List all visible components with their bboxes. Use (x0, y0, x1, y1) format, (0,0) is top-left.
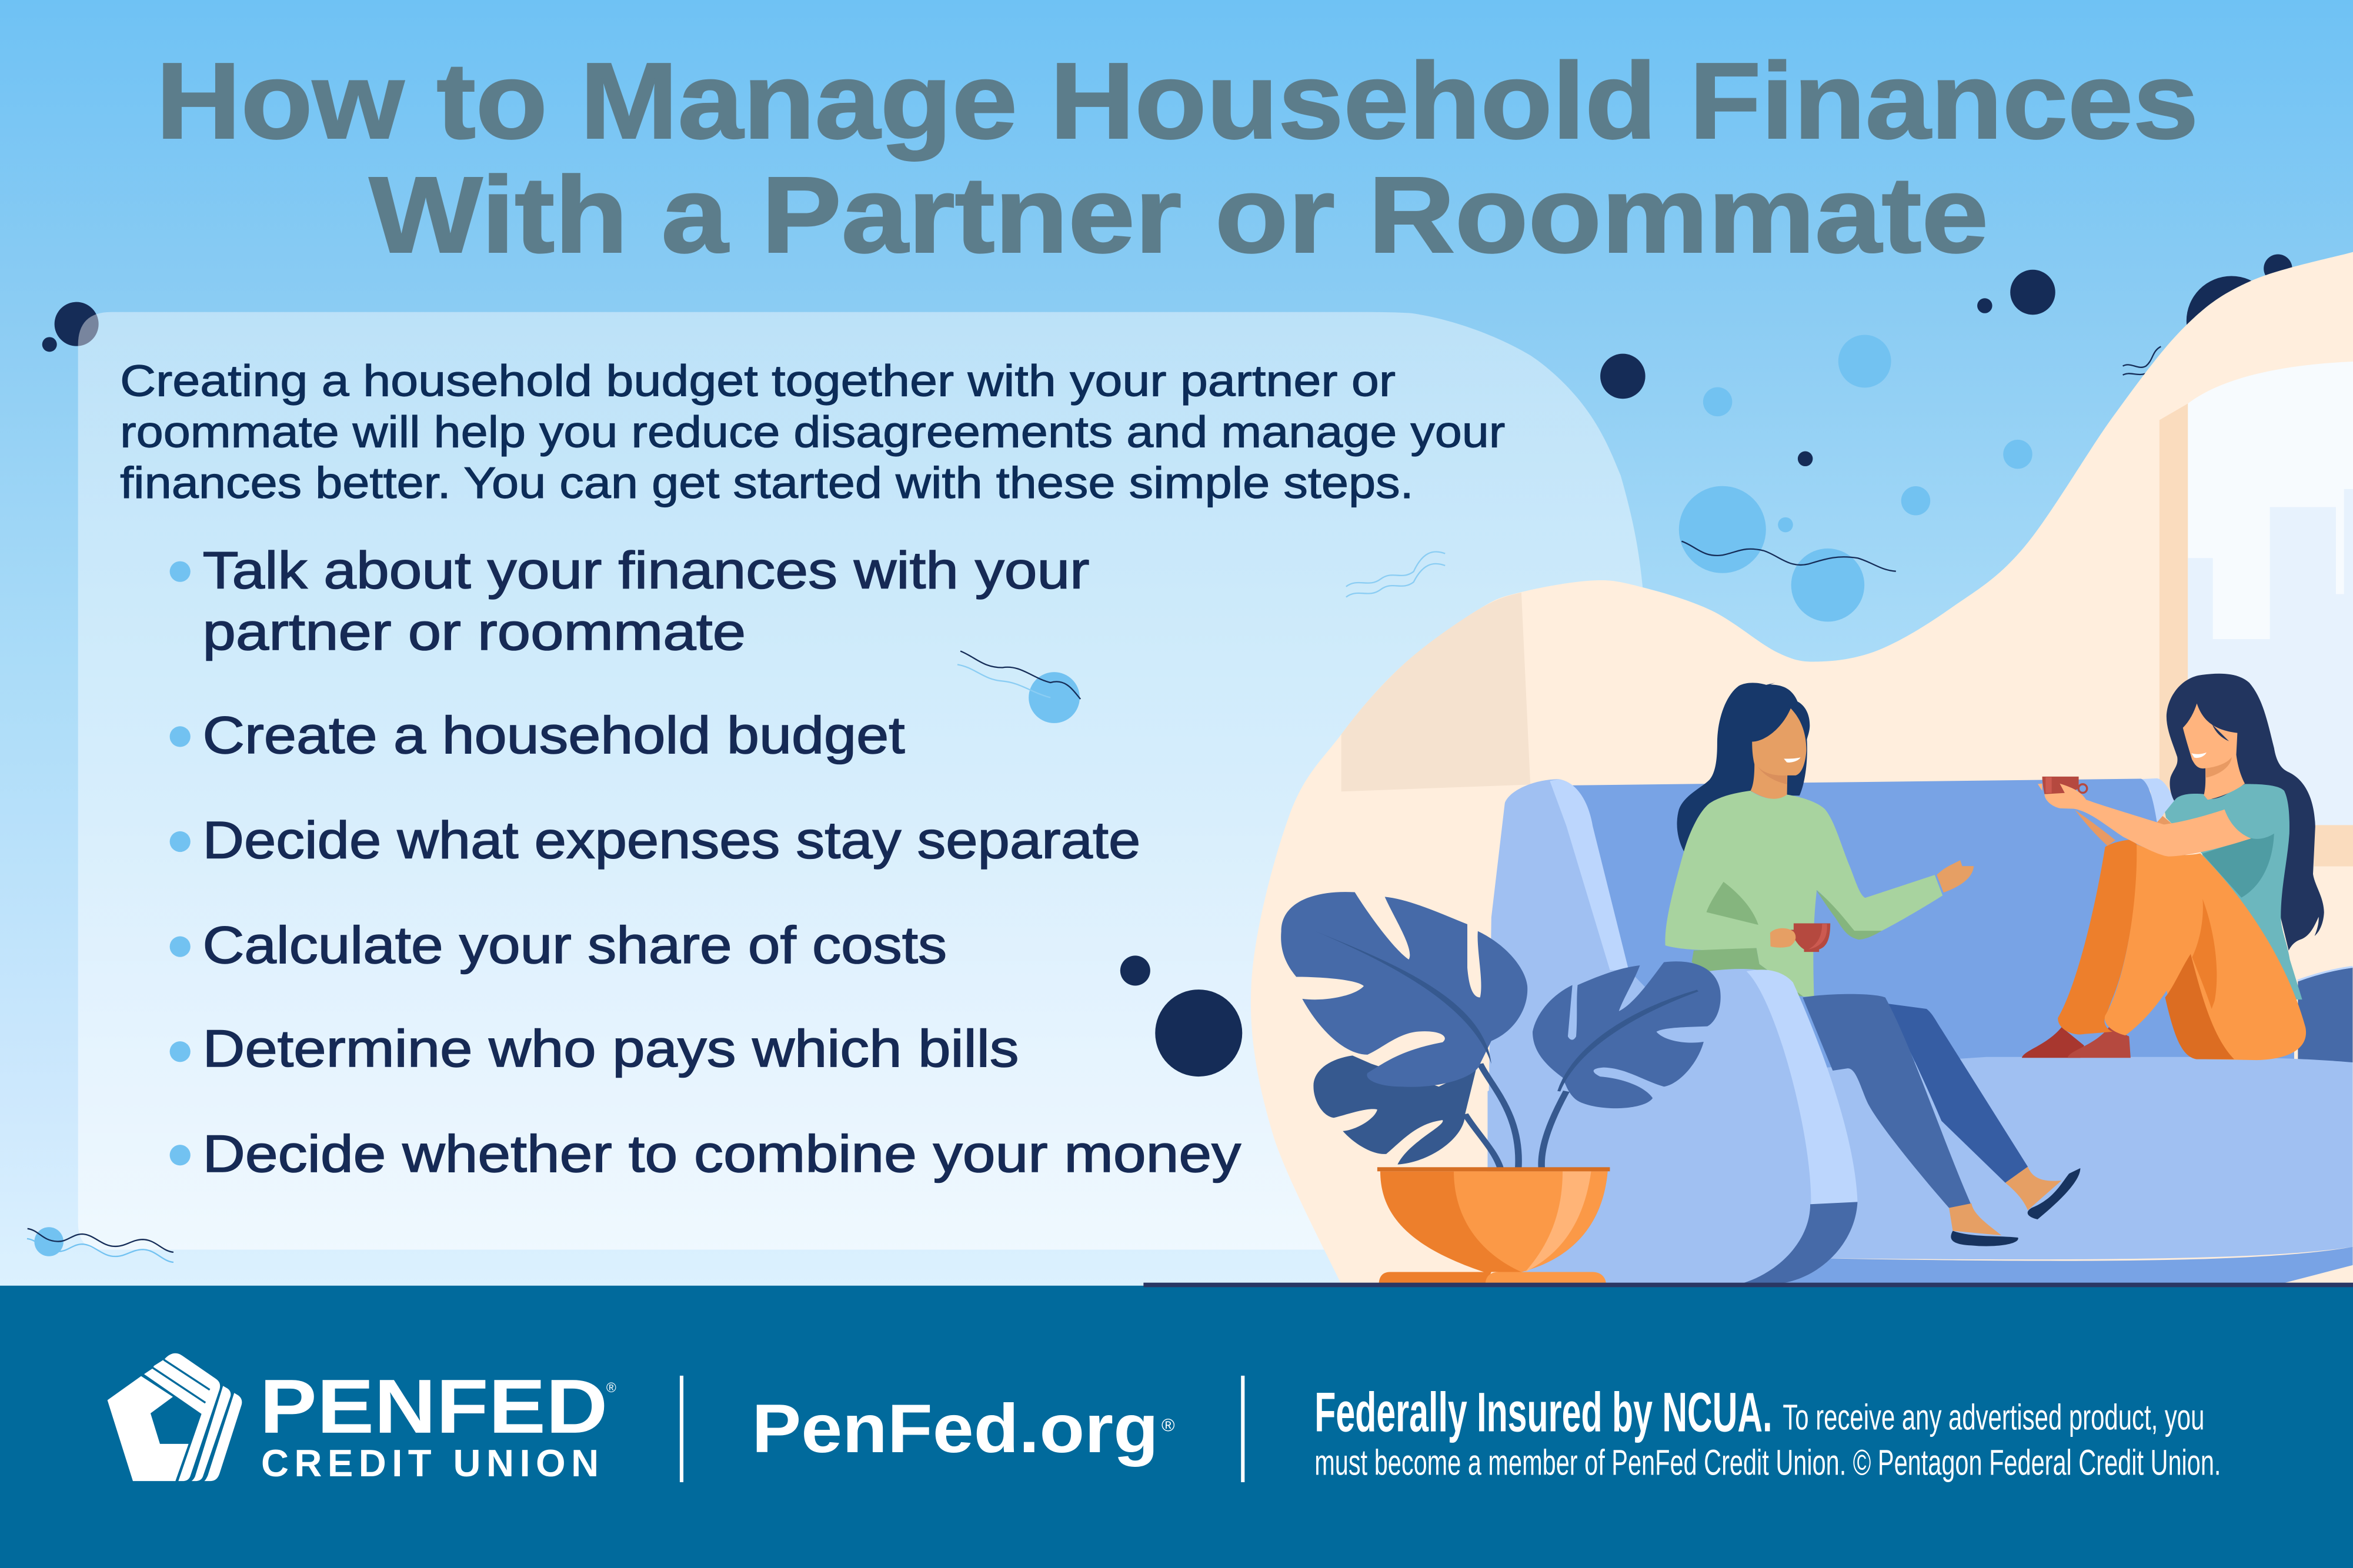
woman on the left (1665, 683, 2080, 1246)
list of steps (170, 540, 1241, 1183)
shoes (2022, 1027, 2131, 1058)
step 2: Create a household budget (202, 706, 905, 764)
divider (1241, 1376, 1244, 1482)
floor line (1143, 1283, 2353, 1287)
right leaf (1533, 961, 1721, 1108)
step 4: Calculate your share of costs (202, 915, 947, 974)
arms, hand and cup (2038, 777, 2251, 857)
PenFed logo: ® (606, 1380, 616, 1395)
sofa left back cushion (1487, 779, 1701, 1183)
PenFed logo (108, 1353, 616, 1485)
sofa seat (1814, 1057, 2352, 1259)
intro paragraph: roommate will help you reduce disagreements and manage your (120, 407, 1505, 456)
step 5: Determine who pays which bills (202, 1019, 1019, 1078)
sofa back (1551, 779, 2352, 1091)
intro paragraph (120, 356, 1505, 507)
wall shadow patch (1341, 593, 1530, 791)
disclosure text (1314, 1382, 2221, 1482)
upper body (1665, 683, 1974, 997)
icon: pentagon emblem (108, 1353, 242, 1481)
pot (1380, 1171, 1608, 1272)
sofa base (1731, 1247, 2352, 1285)
potted plant (1281, 892, 1721, 1285)
website: PenFed.org (752, 1390, 1159, 1467)
title: With a Partner or Roommate (369, 155, 1988, 275)
window with city skyline (2160, 362, 2353, 867)
PenFed logo: CREDIT UNION (261, 1442, 599, 1485)
intro paragraph: Creating a household budget together with your partner or (120, 356, 1396, 406)
title (156, 41, 2198, 275)
panel: introduction and steps background (78, 312, 1643, 1250)
divider (680, 1376, 683, 1482)
decorative dots upper left (42, 302, 99, 352)
step 6: Decide whether to combine your money (202, 1124, 1241, 1183)
decorative bubbles (27, 255, 2292, 1262)
cream wall shape (1251, 252, 2353, 1284)
sofa light back edge (2141, 778, 2175, 824)
hair, shirt, face (2165, 674, 2324, 999)
intro paragraph: finances better. You can get started with these simple steps. (120, 458, 1414, 507)
step 3: Decide what expenses stay separate (202, 811, 1140, 870)
step 1: partner or roommate (202, 602, 746, 661)
title: How to Manage Household Finances (156, 41, 2198, 161)
lower leaf (1313, 1055, 1476, 1165)
website: ® (1162, 1415, 1175, 1435)
step 1: Talk about your finances with your (202, 540, 1090, 599)
step 1 (170, 540, 1090, 661)
stems (1465, 1064, 1566, 1168)
illustration: sofa, women and plant (1281, 674, 2352, 1285)
disclosure text: Federally Insured by NCUA. (1314, 1382, 1773, 1443)
orange trousers (2058, 840, 2306, 1060)
big leaf (1281, 892, 1527, 1087)
woman on the right (2022, 674, 2324, 1060)
footer band (0, 1286, 2353, 1568)
front armrest (1487, 969, 1857, 1285)
legs and shoes (1803, 994, 2080, 1246)
wordmark: PENFED (259, 1363, 608, 1449)
